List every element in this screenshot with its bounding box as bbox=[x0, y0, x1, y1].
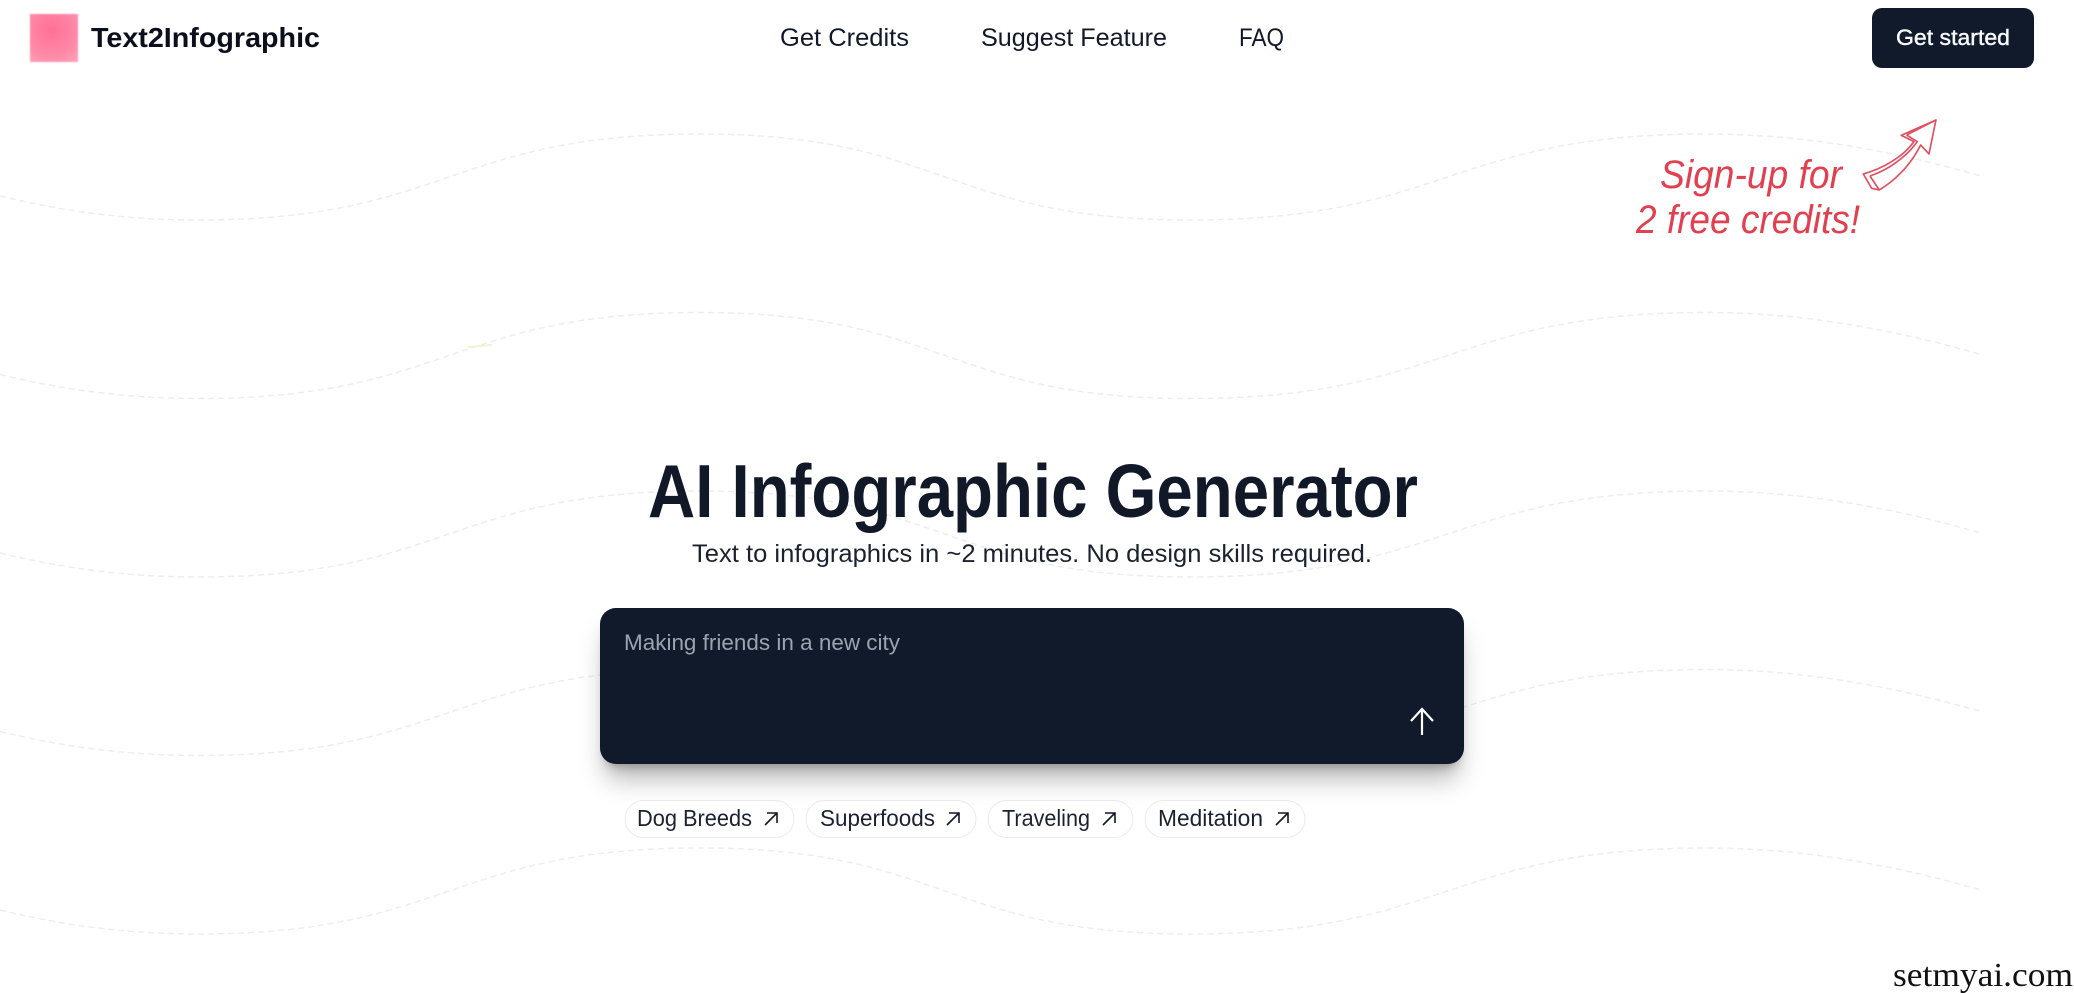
callout: sign-up for free credits bbox=[1635, 153, 1860, 242]
callout: sign-up for free credits: 2 free credits! bbox=[1635, 198, 1860, 242]
icon: hand-drawn arrow to button bbox=[1863, 120, 1936, 190]
chip: meditation bbox=[1145, 800, 1305, 838]
navigation menu: FAQ bbox=[1239, 24, 1284, 52]
subtitle: Text to infographics in ~2 minutes. No design skills required. bbox=[692, 540, 1372, 568]
chip: meditation: Meditation bbox=[1158, 805, 1263, 831]
chip: dog breeds bbox=[625, 800, 794, 838]
callout: sign-up for free credits: Sign-up for bbox=[1660, 153, 1844, 197]
chip: superfoods: Superfoods bbox=[820, 805, 935, 831]
get started button: Get started bbox=[1896, 25, 2010, 50]
logo icon bbox=[30, 14, 78, 62]
navigation menu: Suggest Feature bbox=[981, 24, 1167, 52]
chip: traveling: Traveling bbox=[1002, 805, 1090, 831]
title: AI Infographic Generator bbox=[648, 449, 1418, 533]
navigation menu bbox=[780, 24, 1284, 52]
chip: superfoods bbox=[806, 800, 976, 838]
get started button bbox=[1872, 8, 2034, 68]
example topic chips bbox=[625, 800, 1305, 838]
placeholder text: Making friends in a new city bbox=[624, 630, 901, 655]
prompt input panel bbox=[600, 608, 1464, 764]
navigation menu: Get Credits bbox=[780, 24, 909, 52]
chip: dog breeds: Dog Breeds bbox=[637, 805, 752, 831]
watermark: setmyai.com bbox=[1893, 957, 2073, 993]
chip: traveling bbox=[988, 800, 1133, 838]
brand name: Text2Infographic bbox=[91, 22, 320, 53]
icon: submit arrow bbox=[1411, 709, 1433, 735]
